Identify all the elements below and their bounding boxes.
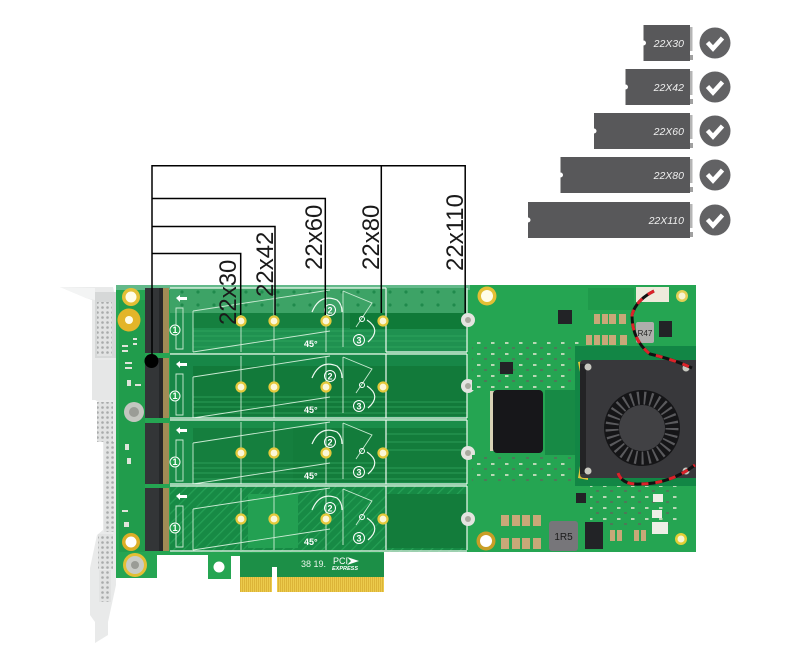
cooling fan (578, 360, 696, 480)
left side mounting holes and screws (118, 288, 147, 577)
M.2 slot row 3 (170, 420, 467, 485)
M.2 slot row 3: 45° (304, 471, 318, 481)
length labels: 22x110 (442, 194, 469, 271)
M.2 slot row 4: 1 (172, 523, 178, 533)
leader origin dot (144, 354, 158, 368)
leader lines (152, 166, 465, 360)
M.2 slot row 1: 2 (327, 306, 333, 316)
SSD size 22X30 with check: 22X30 (653, 38, 684, 50)
inductor R47: R47 (638, 329, 653, 338)
M.2 slot row 2: 1 (172, 391, 178, 401)
inductor 1R5 (549, 521, 578, 551)
M.2 slot row 2: 3 (356, 402, 362, 412)
gold edge connector (240, 567, 384, 593)
inductor R47 (636, 322, 654, 343)
M.2 slot row 3: 2 (327, 438, 333, 448)
SSD size 22X60 with check (594, 113, 730, 149)
PCIe logo marking: EXPRESS (332, 566, 358, 572)
mounting bracket (60, 287, 116, 643)
SSD size 22X60 with check: 22X60 (653, 126, 684, 138)
capacitors (501, 314, 646, 549)
M.2 slot row 2: 2 (327, 372, 333, 382)
right side gold holes (476, 286, 688, 550)
length labels: 22x42 (252, 232, 279, 297)
M.2 connectors (145, 288, 169, 551)
left strip small components (122, 338, 141, 527)
M.2 slot row 4 (170, 486, 467, 552)
M.2 slot row 1: 45° (304, 339, 318, 349)
length labels: 22x30 (215, 260, 242, 325)
M.2 slot row 4: 2 (327, 504, 333, 514)
SSD size 22X110 with check: 22X110 (648, 215, 684, 227)
SSD size 22X110 with check (528, 202, 730, 238)
mounting tab hole (214, 562, 224, 572)
white SMD parts near fan (652, 494, 668, 534)
M.2 slot row 1 (170, 288, 467, 353)
length labels (215, 194, 469, 325)
M.2 slot row 3: 1 (172, 457, 178, 467)
M.2 length mounting holes (236, 316, 388, 524)
M.2 slot row 4: 3 (356, 534, 362, 544)
M.2 slot row 1: 1 (172, 325, 178, 335)
SSD size 22X42 with check: 22X42 (653, 82, 684, 94)
SSD size 22X30 with check (644, 25, 730, 61)
controller chip (490, 390, 543, 453)
right side components field (472, 288, 696, 528)
M.2 slot row 2: 45° (304, 405, 318, 415)
SSD size 22X80 with check (560, 157, 730, 193)
small ICs (500, 310, 672, 549)
SSD size 22X80 with check: 22X80 (653, 170, 684, 182)
PCIe logo marking: PCI (333, 556, 348, 566)
SSD size 22X42 with check (626, 69, 730, 105)
inductor 1R5: 1R5 (554, 532, 573, 543)
fan connector (636, 287, 669, 302)
M.2 slot row 1: 3 (356, 336, 362, 346)
length labels: 22x80 (358, 205, 385, 270)
M.2 slot row 4: 45° (304, 537, 318, 547)
silver standoffs (461, 313, 475, 526)
circuit board (116, 285, 696, 593)
PCIe logo marking (301, 556, 359, 572)
M.2 slot row 2 (170, 354, 467, 419)
fan wires (618, 291, 695, 484)
length labels: 22x60 (301, 205, 328, 270)
M.2 slot row 3: 3 (356, 468, 362, 478)
PCIe logo marking: 38 19. (301, 559, 326, 569)
